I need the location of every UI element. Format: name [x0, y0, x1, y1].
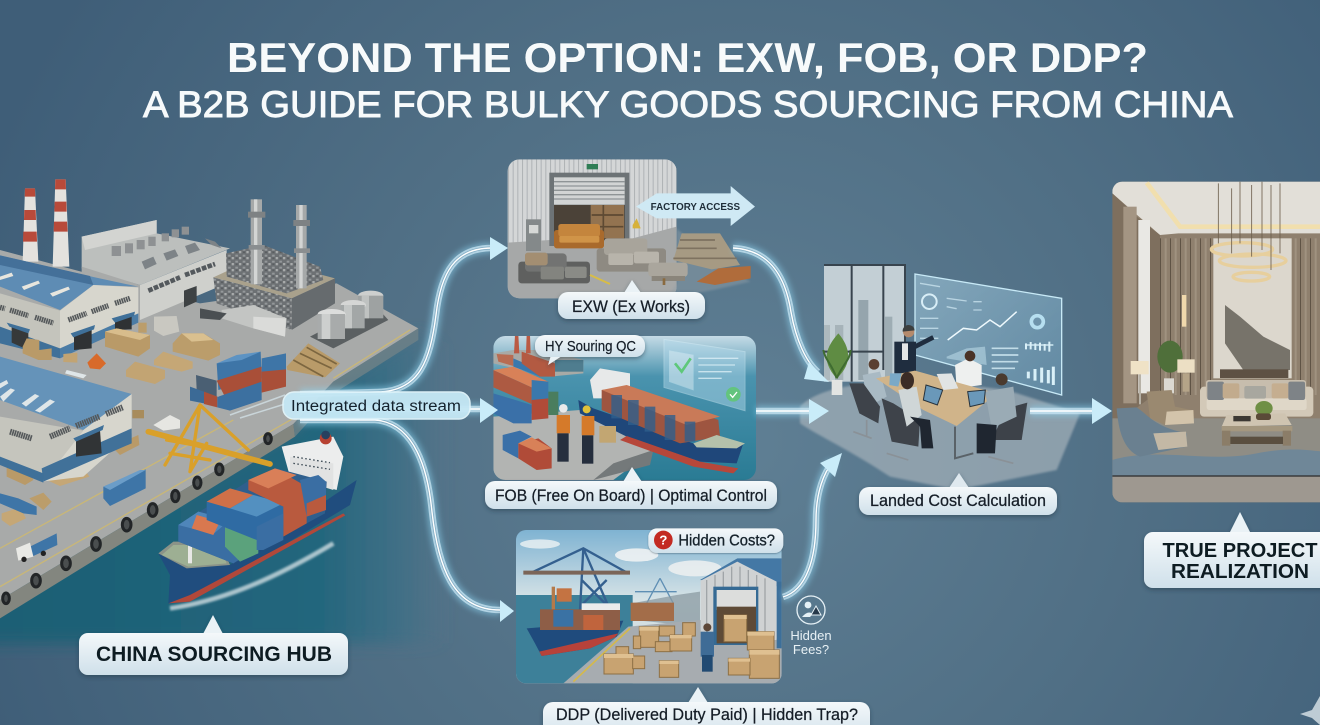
label: True Project Realization — [1144, 512, 1320, 588]
factory access arrow: FACTORY ACCESS — [651, 202, 740, 213]
lumber stack — [673, 233, 740, 269]
label: FOB — [485, 467, 777, 509]
warehouse — [700, 558, 782, 587]
orange sofa — [554, 224, 604, 248]
logs — [287, 343, 340, 377]
dock ground — [0, 250, 418, 600]
wall sconces — [1182, 295, 1186, 327]
hidden costs callout — [648, 528, 783, 553]
panel: EXW — [508, 159, 755, 298]
panel: DDP — [516, 528, 783, 683]
boxes — [604, 615, 779, 678]
factory access arrow — [636, 186, 755, 226]
middle sofa — [597, 238, 666, 272]
plants — [1157, 341, 1183, 373]
label: Landed Cost Calculation — [859, 473, 1057, 515]
ceiling — [1112, 182, 1320, 235]
corner sparkle mark — [1300, 696, 1320, 725]
title: BEYOND THE OPTION: EXW, FOB, OR DDP? — [227, 34, 1148, 81]
hidden costs callout: Hidden Costs? — [678, 533, 775, 550]
crane — [148, 405, 270, 472]
shipping containers stack — [0, 352, 286, 515]
rug and floor — [1112, 418, 1320, 460]
integrated data stream pill: Integrated data stream — [291, 398, 461, 415]
plant — [823, 333, 851, 395]
inspectors — [557, 415, 570, 433]
meeting table — [876, 371, 997, 426]
ship — [590, 368, 630, 398]
label: True Project Realization: TRUE PROJECT — [1162, 539, 1318, 562]
truck — [16, 533, 57, 562]
label: DDP: DDP (Delivered Duty Paid) | Hidden Trap? — [556, 705, 858, 724]
warehouse 1 — [0, 255, 138, 358]
hidden costs callout: ? — [659, 533, 667, 548]
tires — [3, 434, 271, 604]
flow arrows from data stream to Incoterm options — [300, 248, 1098, 610]
left gray sofa — [518, 253, 590, 283]
person — [701, 632, 714, 657]
label: EXW: EXW (Ex Works) — [572, 297, 690, 316]
integrated data stream pill — [230, 392, 470, 419]
refinery — [200, 199, 388, 348]
far people — [849, 325, 982, 438]
ottoman — [648, 263, 688, 285]
glow — [300, 248, 1098, 610]
port crane — [523, 548, 630, 610]
hidden fees icon and note: Hidden — [790, 628, 832, 643]
panel: landed cost meeting — [800, 265, 1080, 490]
warehouse 2 — [0, 357, 132, 483]
timber logs — [697, 266, 751, 285]
wall panels — [1160, 238, 1213, 395]
grey factory — [82, 220, 230, 320]
arrow heads — [480, 237, 1112, 622]
hidden fees icon and note — [790, 596, 832, 657]
near people and laptops — [882, 372, 1027, 463]
chimneys — [23, 179, 69, 267]
hidden fees icon and note: Fees? — [793, 642, 829, 657]
stacked containers — [493, 370, 532, 404]
label: HY Souring QC — [535, 335, 645, 365]
lamps — [1131, 361, 1149, 374]
label: China Sourcing Hub: CHINA SOURCING HUB — [96, 643, 332, 666]
title: A B2B GUIDE FOR BULKY GOODS SOURCING FROM CHINA — [143, 83, 1233, 125]
scene: China sourcing hub port — [0, 179, 473, 643]
label: True Project Realization: REALIZATION — [1171, 560, 1309, 583]
label: FOB: FOB (Free On Board) | Optimal Control — [495, 486, 767, 505]
coffee table — [1222, 416, 1292, 426]
hologram document — [664, 339, 745, 411]
panel: interior — [1112, 182, 1320, 502]
label: DDP — [543, 687, 870, 725]
chandelier — [1211, 243, 1286, 281]
label: China Sourcing Hub — [79, 615, 348, 675]
dock lines — [0, 330, 410, 587]
floor extension — [667, 228, 751, 298]
label: EXW — [558, 280, 705, 319]
cargo stacks — [2, 316, 220, 526]
armchairs — [1147, 390, 1194, 425]
dashboard — [915, 274, 1062, 395]
box tops — [604, 615, 779, 664]
sofa — [1200, 387, 1313, 417]
curtains — [1112, 193, 1160, 427]
title — [143, 34, 1233, 125]
sea — [0, 333, 473, 643]
label: HY Souring QC: HY Souring QC — [545, 339, 636, 355]
cargo ship — [158, 431, 357, 608]
ship — [527, 621, 623, 656]
window — [824, 265, 905, 382]
label: Landed Cost Calculation: Landed Cost Calculation — [870, 492, 1046, 510]
floor — [800, 382, 1080, 490]
ground — [563, 620, 782, 683]
panel: FOB — [493, 335, 756, 480]
